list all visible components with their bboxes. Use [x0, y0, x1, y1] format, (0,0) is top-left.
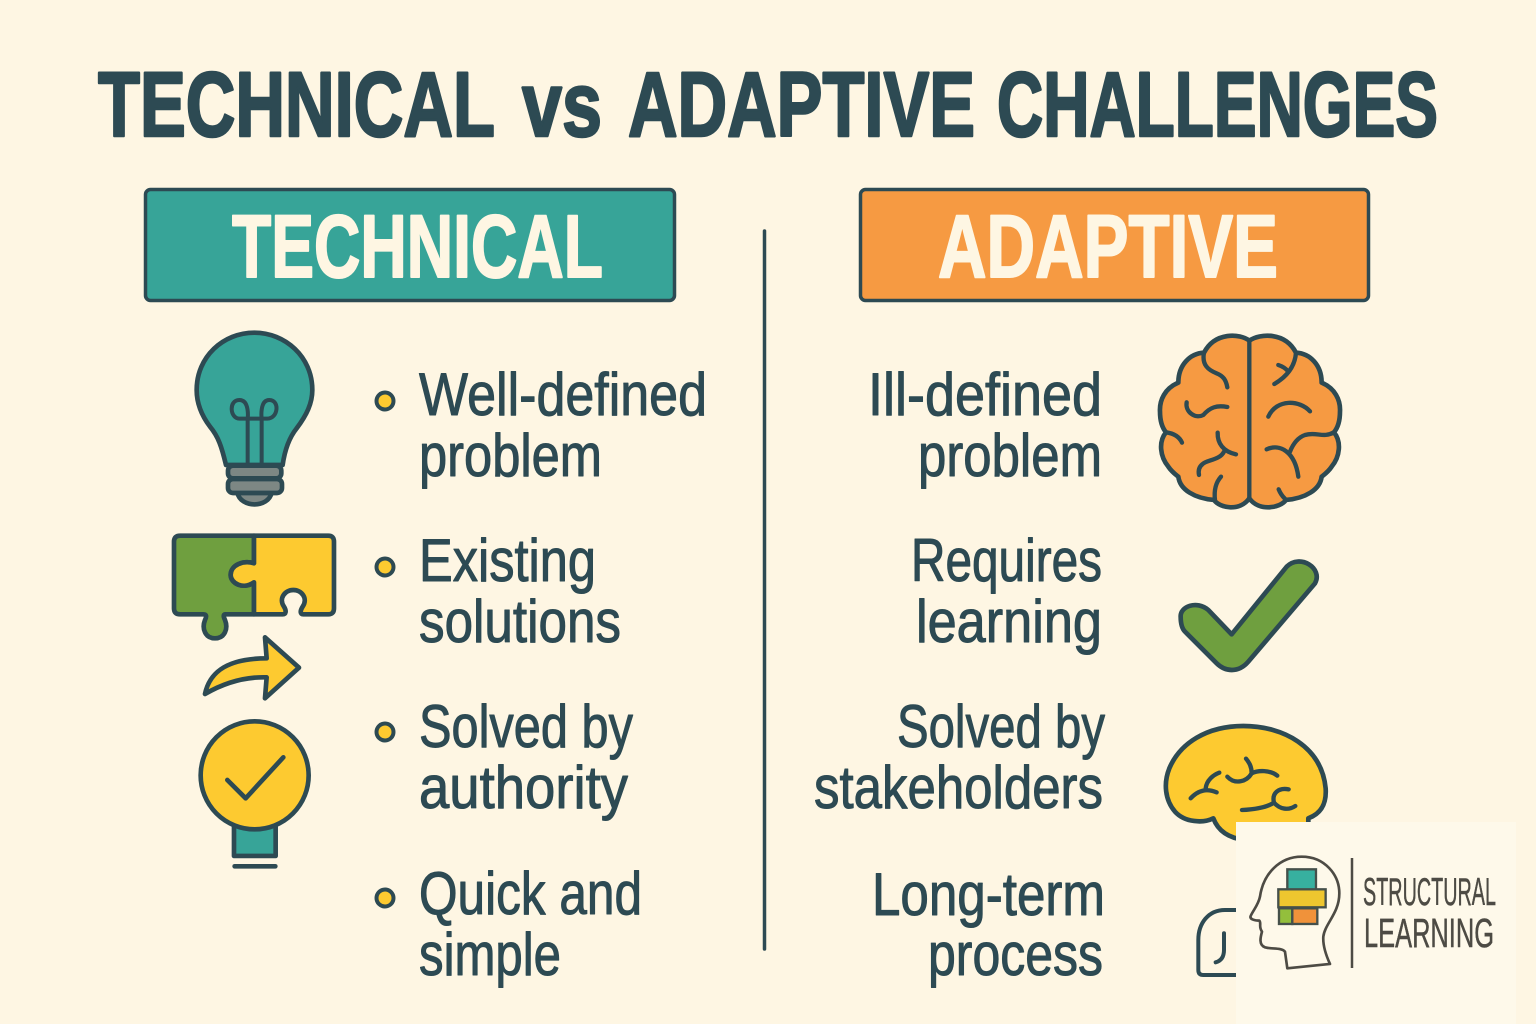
item: long-term process: process	[928, 921, 1103, 988]
item: ill-defined problem: Ill-defined	[868, 361, 1102, 428]
center divider	[763, 231, 766, 949]
panel: technical header	[146, 190, 674, 300]
bullet: existing solutions: Existing	[419, 527, 596, 594]
item: solved by stakeholders: Solved by	[897, 693, 1105, 760]
icon: orange brain	[1160, 336, 1340, 507]
bullet: solved by authority	[376, 693, 633, 821]
item: ill-defined problem: problem	[918, 422, 1102, 489]
bullet: existing solutions: solutions	[419, 588, 621, 655]
bullet: well-defined problem	[376, 361, 707, 489]
bullet: solved by authority: authority	[419, 754, 628, 821]
item: solved by stakeholders	[814, 693, 1105, 821]
icon: puzzle pieces	[174, 536, 334, 638]
item: requires learning: learning	[916, 588, 1102, 655]
icon: partial speech bubble	[1198, 910, 1240, 975]
title: vs	[522, 54, 602, 156]
bullet: quick and simple	[376, 860, 642, 988]
bullet: quick and simple: simple	[419, 921, 561, 988]
item: long-term process	[872, 861, 1105, 988]
bullet: solved by authority: Solved by	[419, 693, 633, 760]
icon: teal light bulb	[197, 333, 312, 504]
logo: structural learning	[1236, 822, 1516, 1024]
icon: yellow bulb with check	[201, 721, 309, 866]
item: long-term process: Long-term	[872, 861, 1105, 928]
title	[98, 54, 1438, 156]
panel: technical header: TECHNICAL	[232, 196, 603, 296]
item: requires learning: Requires	[911, 527, 1102, 594]
panel: adaptive header: ADAPTIVE	[938, 196, 1278, 296]
bullet: well-defined problem: problem	[419, 422, 602, 489]
bullet: quick and simple: Quick and	[419, 860, 642, 927]
bullet: well-defined problem: Well-defined	[419, 361, 707, 428]
technical list	[376, 361, 707, 988]
icon: yellow brain side view	[1166, 726, 1326, 840]
title: ADAPTIVE	[628, 54, 975, 156]
item: requires learning	[911, 527, 1102, 655]
bullet: existing solutions	[376, 527, 621, 655]
item: ill-defined problem	[868, 361, 1102, 489]
icon: green checkmark	[1181, 562, 1317, 670]
icon: curved arrow	[205, 637, 299, 698]
title: TECHNICAL	[98, 54, 495, 156]
item: solved by stakeholders: stakeholders	[814, 754, 1103, 821]
logo icon: head with blocks	[1250, 857, 1339, 968]
adaptive list	[814, 361, 1105, 988]
